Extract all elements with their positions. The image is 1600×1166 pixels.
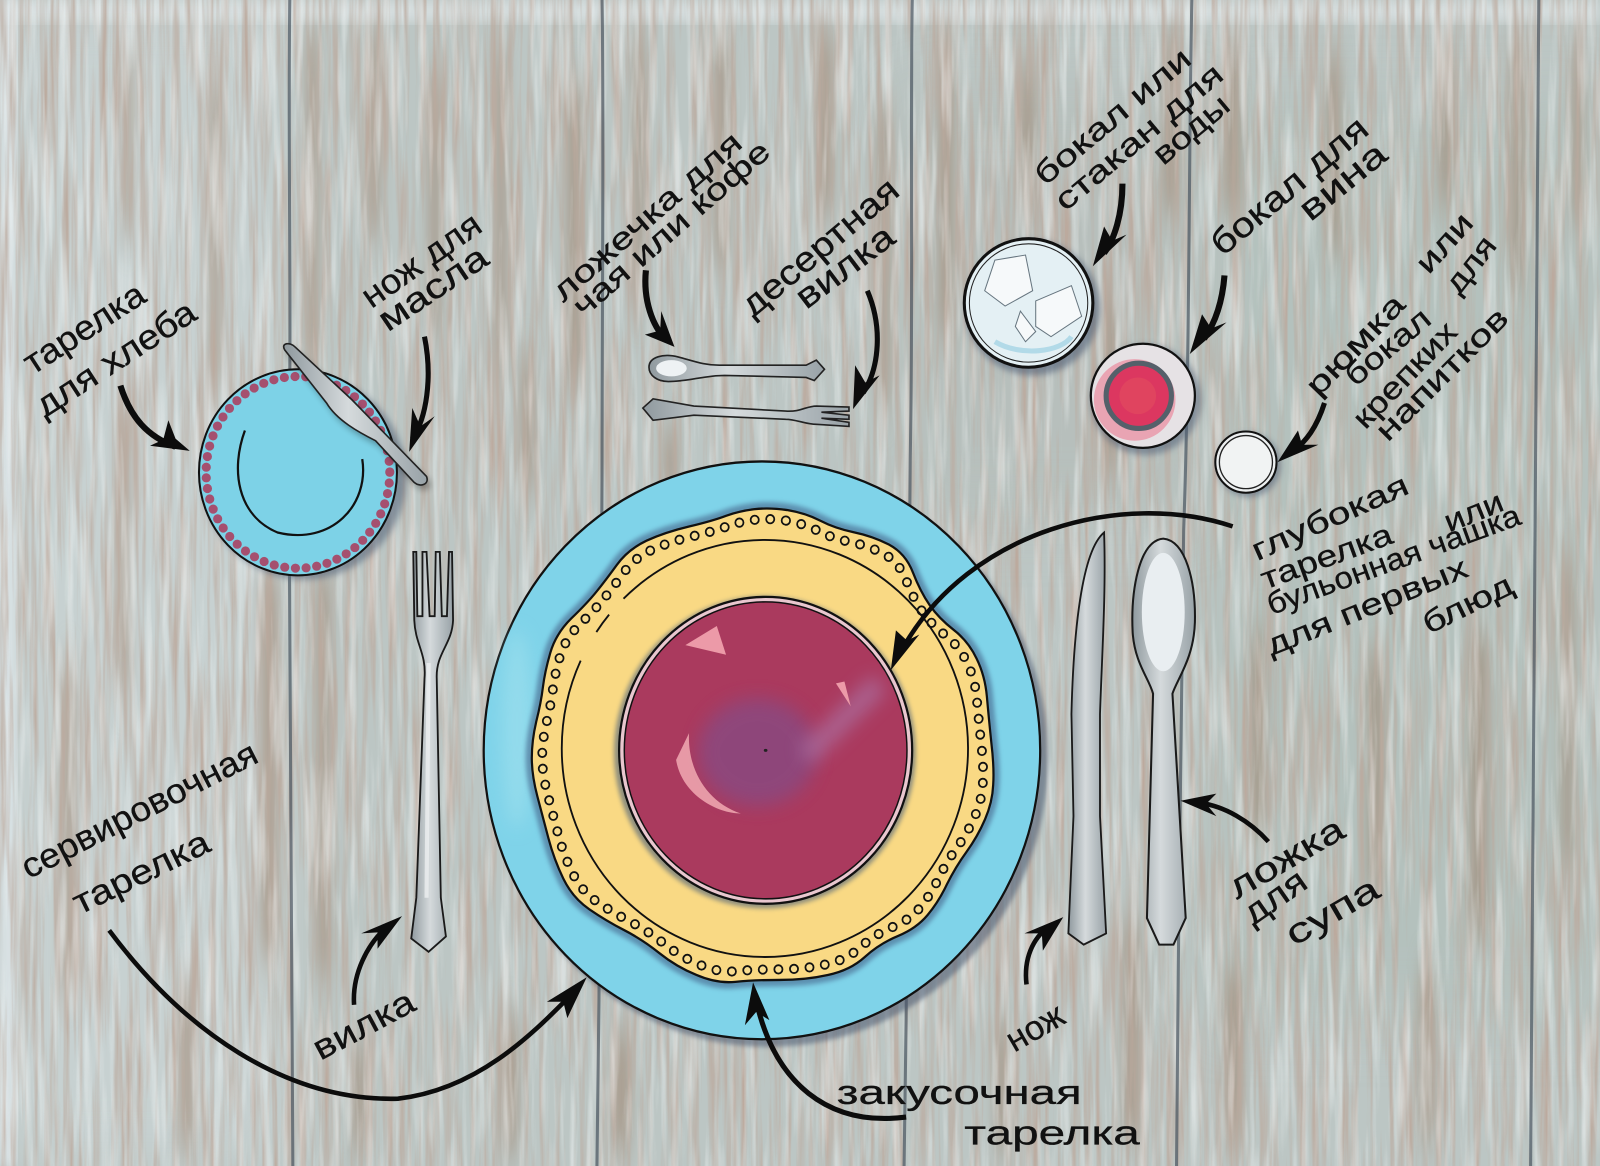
- label: soup bowl: бульонная чашка: [1262, 498, 1526, 622]
- label: fork: вилка: [306, 982, 422, 1068]
- appetizer plate: [532, 508, 993, 982]
- serving plate with appetizer plate and soup bowl: [484, 461, 1048, 1047]
- arrow: butter knife: [409, 337, 435, 452]
- label: serving plate: тарелка: [66, 823, 217, 922]
- arrow: shot glass: [1278, 403, 1324, 462]
- label: dessert fork: десертная: [734, 171, 907, 324]
- wine glass: [1091, 344, 1201, 455]
- label: butter knife: нож для: [354, 206, 489, 316]
- butter knife: [284, 344, 430, 490]
- arrow: soup bowl: [891, 513, 1233, 670]
- bread plate: [199, 369, 406, 579]
- arrow: dessert fork: [853, 291, 880, 409]
- label: water glass: [1028, 41, 1237, 218]
- label: soup bowl: блюд: [1417, 568, 1519, 641]
- arrow: water glass: [1093, 184, 1127, 266]
- arrow: bread plate: [120, 386, 190, 451]
- label: appetizer plate: закусочная: [837, 1074, 1082, 1112]
- label: spirits glass: [1299, 206, 1515, 448]
- label: soup bowl: для первых: [1261, 551, 1473, 662]
- label: bread plate: тарелка: [16, 275, 153, 382]
- water glass: [964, 239, 1100, 375]
- arrow: serving plate: [109, 930, 587, 1099]
- label: butter knife: масла: [371, 238, 496, 339]
- label: soup spoon: [1222, 810, 1387, 954]
- label: spirits glass: рюмка: [1299, 286, 1413, 403]
- label: bread plate: для хлеба: [29, 293, 204, 425]
- soup bowl: [614, 596, 916, 908]
- label: water glass: стакан для: [1048, 57, 1230, 218]
- arrow: teaspoon: [645, 270, 674, 347]
- soup spoon: [1132, 539, 1195, 945]
- label: teaspoon: [546, 125, 777, 324]
- label: appetizer plate: [837, 1074, 1141, 1153]
- label: soup spoon: супа: [1279, 869, 1387, 954]
- shot glass: [1215, 432, 1281, 497]
- label: dessert fork: вилка: [788, 217, 903, 317]
- serving plate: [484, 461, 1048, 1047]
- arrow: soup spoon: [1181, 794, 1268, 842]
- label: wine glass: бокал для: [1203, 110, 1376, 263]
- label: water glass: воды: [1146, 88, 1237, 172]
- label: soup spoon: ложка: [1222, 810, 1352, 907]
- dessert fork: [643, 399, 849, 426]
- label: bread plate: [16, 275, 204, 425]
- label: spirits glass: бокал: [1338, 301, 1438, 393]
- arrow: wine glass: [1190, 275, 1227, 354]
- knife: [1068, 533, 1106, 945]
- arrow: fork: [354, 916, 402, 1005]
- label: soup bowl: или: [1439, 485, 1508, 539]
- label: soup bowl: глубокая: [1246, 468, 1414, 567]
- label: spirits glass: напитков: [1369, 301, 1515, 448]
- label: appetizer plate: тарелка: [964, 1115, 1141, 1153]
- panel: table setting drawing: [199, 239, 1281, 1047]
- teaspoon: [649, 355, 824, 382]
- label: teaspoon: чая или кофе: [566, 134, 777, 324]
- label: soup bowl: [1246, 468, 1526, 662]
- arrows: [109, 184, 1324, 1118]
- arrow: appetizer plate: [745, 982, 906, 1118]
- label: wine glass: вина: [1291, 134, 1395, 229]
- label: spirits glass: для: [1438, 229, 1504, 300]
- fork: [411, 552, 453, 952]
- label: soup spoon: для: [1236, 862, 1314, 933]
- label: spirits glass: или: [1409, 206, 1480, 280]
- label: teaspoon: ложечка для: [546, 125, 749, 308]
- label: water glass: бокал или: [1028, 41, 1198, 192]
- label: soup bowl: тарелка: [1256, 517, 1398, 596]
- label: spirits glass: крепких: [1346, 315, 1464, 435]
- label: serving plate: сервировочная: [15, 735, 264, 886]
- arrow: knife: [1024, 917, 1063, 984]
- label: wine glass: [1203, 110, 1395, 263]
- label: knife: нож: [999, 996, 1072, 1060]
